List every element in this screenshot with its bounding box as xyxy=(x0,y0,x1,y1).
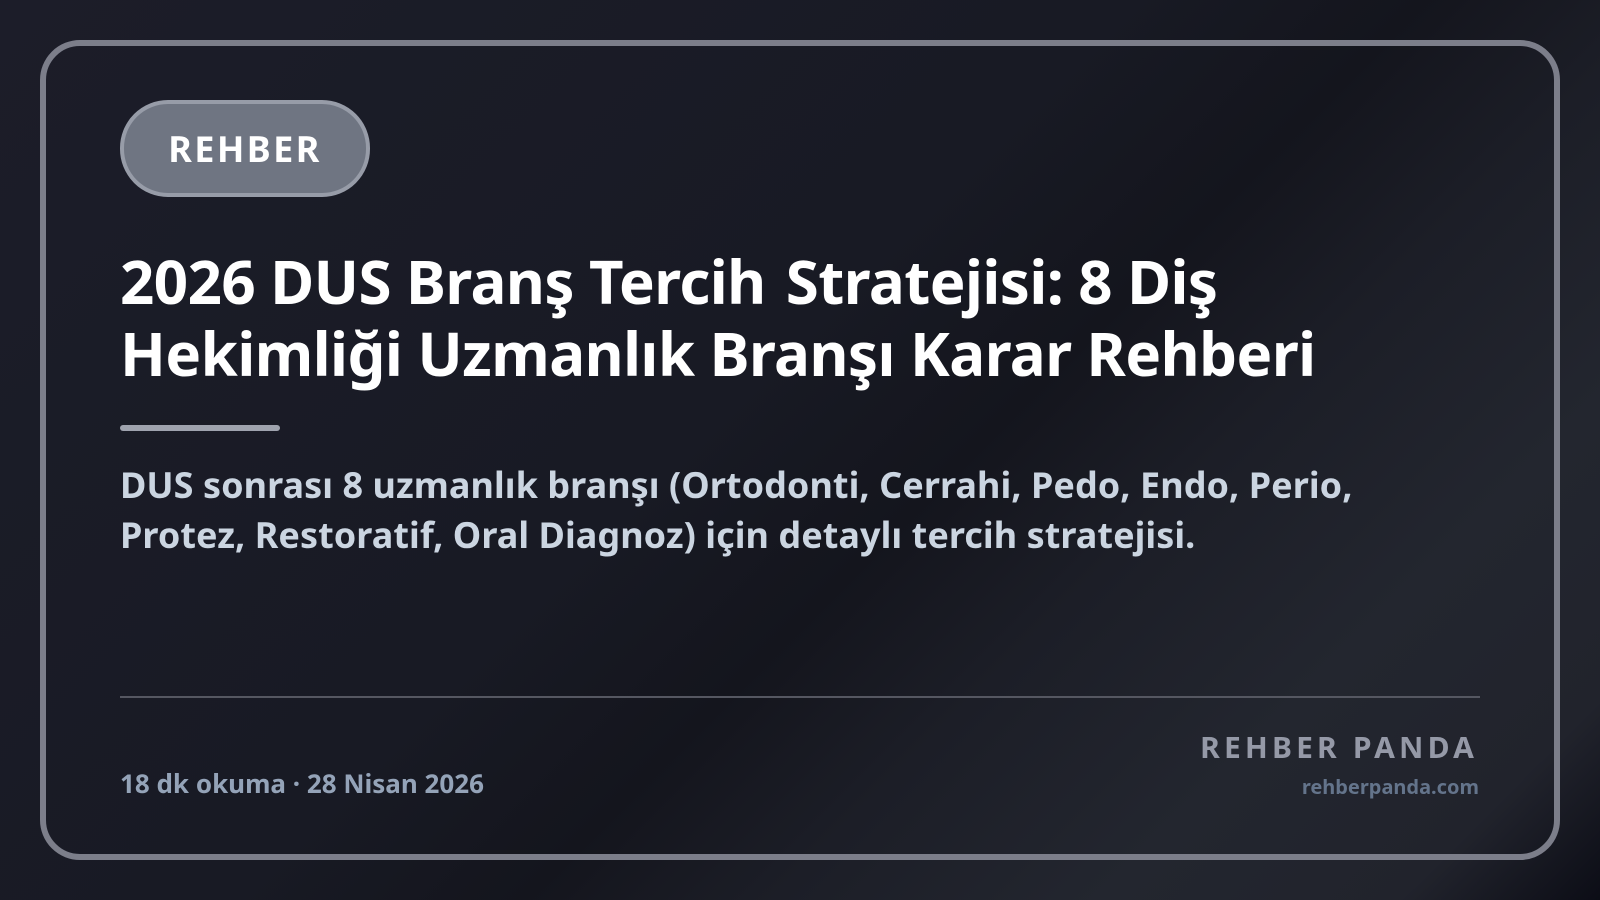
subtitle xyxy=(120,460,1353,559)
website: rehberpanda.com xyxy=(1302,773,1479,800)
footer divider line xyxy=(120,696,1480,698)
badge: REHBER xyxy=(120,100,370,197)
accent divider xyxy=(120,425,280,431)
title: Hekimliği Uzmanlık Branşı Karar Rehberi xyxy=(120,312,1316,394)
brand name: REHBER PANDA xyxy=(1200,726,1478,767)
badge: REHBER: REHBER xyxy=(168,124,322,173)
subtitle: Protez, Restoratif, Oral Diagnoz) için detaylı tercih stratejisi. xyxy=(120,510,1195,559)
subtitle: DUS sonrası 8 uzmanlık branşı (Ortodonti, Cerrahi, Pedo, Endo, Perio, xyxy=(120,460,1353,509)
title xyxy=(120,240,1316,394)
reading time and date: 18 dk okuma · 28 Nisan 2026 xyxy=(120,765,484,801)
title: 2026 DUS Branş Tercih Stratejisi: 8 Diş xyxy=(120,240,1217,322)
